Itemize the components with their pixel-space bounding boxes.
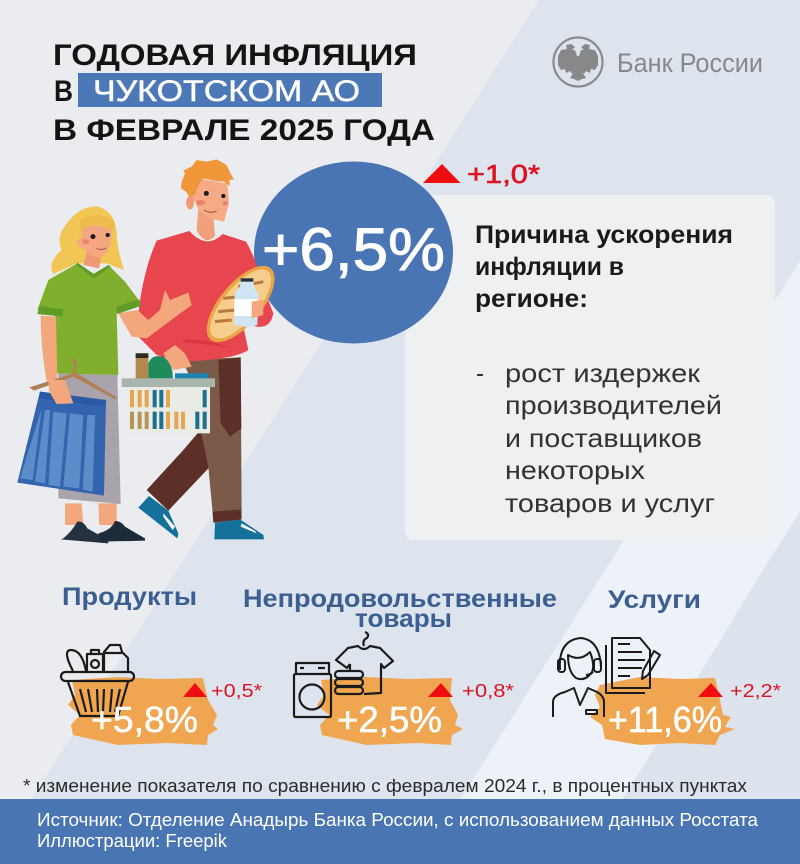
footnote: * изменение показателя по сравнению с февралем 2024 г., в процентных пунктах: [23, 776, 747, 796]
value: +2,5%: [337, 699, 442, 740]
main change indicator: [423, 159, 540, 189]
heading: товары: [355, 605, 452, 633]
icon: operator and document: [553, 638, 660, 717]
title: В ФЕВРАЛЕ 2025 ГОДА: [53, 114, 435, 147]
basket with products: [122, 353, 215, 433]
panel heading: регионе:: [475, 285, 588, 313]
change indicator: [428, 681, 514, 701]
man: [122, 159, 286, 539]
panel body text: товаров и услуг: [505, 488, 715, 518]
panel: reason: [405, 195, 775, 540]
category: non-food goods: [243, 585, 557, 745]
brush background: [590, 677, 735, 745]
region highlight box: [78, 73, 382, 107]
icon: grocery basket: [61, 645, 134, 716]
panel body text: [476, 358, 722, 518]
panel body text: производителей: [505, 390, 722, 420]
illustration: shoppers: [17, 159, 286, 543]
icon: double-headed eagle: [558, 44, 598, 81]
change indicator: [698, 681, 781, 701]
bread and milk: [195, 255, 286, 353]
title: ГОДОВАЯ ИНФЛЯЦИЯ: [53, 39, 417, 72]
source text: Источник: Отделение Анадырь Банка России, с использованием данных Росстата: [37, 810, 759, 830]
heading: Услуги: [608, 586, 701, 614]
main change indicator: +1,0*: [467, 159, 540, 189]
change indicator: +2,2*: [730, 681, 781, 701]
change indicator: [183, 681, 262, 701]
title: ЧУКОТСКОМ АО: [93, 75, 360, 108]
panel body text: некоторых: [505, 455, 645, 485]
title: В: [54, 75, 73, 108]
main value circle: [254, 162, 453, 344]
heading: [243, 585, 557, 633]
change indicator: +0,5*: [211, 681, 262, 701]
panel body text: рост издержек: [505, 358, 701, 388]
brush background: [317, 677, 463, 745]
change indicator: +0,8*: [462, 681, 514, 701]
value: +11,6%: [608, 699, 722, 740]
title: [53, 39, 435, 147]
panel body text: -: [476, 358, 484, 388]
brush background: [68, 677, 218, 745]
woman: [17, 207, 192, 543]
skirt on hanger: [17, 358, 117, 496]
main value circle: +6,5%: [262, 216, 445, 283]
category: services: [553, 586, 781, 745]
icon: washing machine, shirt and towels: [294, 632, 393, 717]
logo: Bank of Russia: Банк России: [617, 48, 763, 78]
illustration credit: Иллюстрации: Freepik: [37, 831, 228, 851]
footer band: [0, 799, 800, 864]
value: +5,8%: [91, 699, 198, 740]
panel heading: инфляции в: [475, 253, 624, 281]
heading: Продукты: [62, 583, 197, 611]
category: food: [61, 583, 262, 745]
heading: Непродовольственные: [243, 585, 557, 613]
panel body text: и поставщиков: [505, 423, 702, 453]
logo: Bank of Russia: [554, 38, 763, 86]
panel heading: Причина ускорения: [475, 221, 733, 249]
panel heading: [475, 221, 733, 313]
